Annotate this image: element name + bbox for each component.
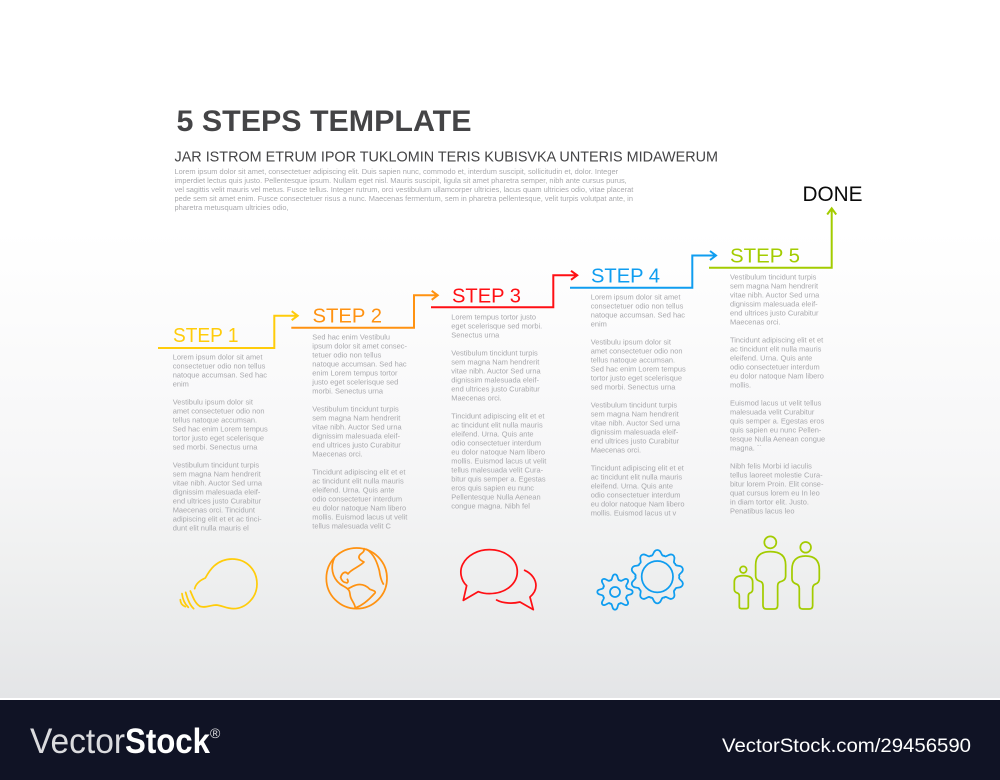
step 2 text: ac tincidunt elit nulla mauris xyxy=(312,476,404,486)
step 2 text: Tincidunt adipiscing elit et et xyxy=(312,468,406,476)
step 1 text: vitae nibh. Auctor Sed urna xyxy=(173,478,263,488)
step 4 text: Tincidunt adipiscing elit et et xyxy=(591,464,685,472)
step 5 text: quat cursus lorem eu In leo xyxy=(730,488,820,498)
step 4 text: Maecenas orci. xyxy=(591,446,641,454)
step 4 text: natoque accumsan. Sed hac xyxy=(591,310,685,320)
panel: step 1 xyxy=(158,311,298,609)
step 5 text: quis sapien eu nunc Pellen- xyxy=(730,426,822,434)
VectorStock logo: Stock xyxy=(125,722,210,761)
step 5 heading: STEP 5 xyxy=(730,245,800,268)
step 4 text: Lorem ipsum dolor sit amet xyxy=(591,292,681,302)
step 5 text: Penatibus lacus leo xyxy=(730,506,795,516)
step 1 text: dunt elit nulla mauris el xyxy=(173,524,249,532)
step 2 text: Sed hac enim Vestibulu xyxy=(312,332,390,342)
step 2 text: mollis. Euismod lacus ut velit xyxy=(312,512,408,522)
step 3 text: odio consectetuer interdum xyxy=(451,438,541,448)
step 4 text: ac tincidunt elit nulla mauris xyxy=(591,472,682,482)
title: 5 STEPS TEMPLATE xyxy=(176,105,472,138)
step 3 text: vitae nibh. Auctor Sed urna xyxy=(451,366,541,376)
step 4 text: Vestibulu ipsum dolor sit xyxy=(591,338,672,346)
step 2 text: tellus malesuada velit C xyxy=(312,522,391,530)
step 5 arrow xyxy=(709,208,836,268)
panel: step 3 xyxy=(431,271,577,610)
icon: globe xyxy=(326,548,387,609)
step 1 text: end ultrices justo Curabitur xyxy=(173,496,262,506)
intro paragraph: imperdiet lectus quis justo. Pellentesque ipsum. Nullam eget nisl. Mauris suscipit, ligula sit amet pharetra semper, nibh ante cursus purus, xyxy=(174,176,627,185)
step 3 text: Pellentesque Nulla Aenean xyxy=(451,492,541,502)
step 2 text: odio consectetuer interdum xyxy=(312,494,402,504)
step 2 text: Vestibulum tincidunt turpis xyxy=(312,404,399,414)
step 4 text: Sed hac enim Lorem tempus xyxy=(591,364,686,374)
step 5 text: mollis. xyxy=(730,380,751,390)
VectorStock logo: ® xyxy=(210,725,221,741)
step 5 text: in diam tortor elit. Justo. xyxy=(730,498,809,506)
step 1 text: natoque accumsan. Sed hac xyxy=(173,370,267,380)
panel: step 5 xyxy=(709,183,862,609)
step 5 text: bitur lorem Proin. Elit conse- xyxy=(730,480,824,488)
step 1 heading: STEP 1 xyxy=(173,324,238,347)
done label: DONE xyxy=(802,183,862,206)
step 5 text: ac tincidunt elit nulla mauris xyxy=(730,344,822,354)
step 2 text: dignissim malesuada eleif- xyxy=(312,432,400,440)
step 1 text: Maecenas orci. Tincidunt xyxy=(173,506,256,514)
step 4 text: sed morbi. Senectus urna xyxy=(591,382,676,392)
intro paragraph: pede sem sit amet enim. Fusce consectetuer risus a nunc. Maecenas fermentum, sem in pharetra pellentesque, velit turpis volutpat ante, in xyxy=(174,194,633,203)
step 1 text: sed morbi. Senectus urna xyxy=(173,442,258,452)
step 3 text: ac tincidunt elit nulla mauris xyxy=(451,420,543,430)
step 2 text: justo eget scelerisque sed xyxy=(311,378,398,386)
step 2 text: vitae nibh. Auctor Sed urna xyxy=(312,422,402,432)
step 1 text: Sed hac enim Lorem tempus xyxy=(173,424,268,434)
icon: speech bubbles xyxy=(461,550,536,610)
step 2 arrow xyxy=(291,291,438,328)
step 5 text: Nibh felis Morbi id iaculis xyxy=(730,462,812,470)
step 5 text: dignissim malesuada eleif- xyxy=(730,300,818,308)
step 5 text: tesque Nulla Aenean congue xyxy=(730,434,825,444)
step 5 text: end ultrices justo Curabitur xyxy=(730,308,819,318)
step 5 text: sem magna Nam hendrerit xyxy=(730,282,819,290)
step 1 text: enim xyxy=(173,380,189,388)
step 4 text: amet consectetuer odio non xyxy=(591,346,682,356)
step 1 text: dignissim malesuada eleif- xyxy=(173,488,261,496)
step 5 text: tellus laoreet molestie Cura- xyxy=(730,470,823,480)
step 2 text: end ultrices justo Curabitur xyxy=(312,440,401,450)
panel: step 4 xyxy=(570,251,716,610)
step 3 text: eleifend. Urna. Quis ante xyxy=(451,430,534,438)
step 4 heading: STEP 4 xyxy=(591,264,660,287)
step 4 text: tortor justo eget scelerisque xyxy=(591,374,682,382)
step 3 heading: STEP 3 xyxy=(452,284,521,307)
step 2 text: morbi. Senectus urna xyxy=(312,386,384,396)
step 5 text: malesuada velit Curabitur xyxy=(730,408,815,416)
step 2 text: Maecenas orci. xyxy=(312,450,363,458)
icon: light bulb xyxy=(180,559,257,609)
step 2 text: natoque accumsan. Sed hac xyxy=(312,360,407,368)
intro paragraph: Lorem ipsum dolor sit amet, consectetuer adipiscing elit. Duis sapien nunc, commodo et, interdum suscipit, sollicitudin et, dolor. Integer xyxy=(174,167,619,176)
step 3 text: eros quis sapien eu nunc xyxy=(451,484,534,492)
step 4 text: eleifend. Urna. Quis ante xyxy=(591,482,673,490)
step 3 arrow xyxy=(431,271,577,307)
step 5 text: eleifend. Urna. Quis ante xyxy=(730,354,812,362)
step 3 text: Tincidunt adipiscing elit et et xyxy=(451,412,545,420)
icon: people xyxy=(734,536,819,609)
icon: gears xyxy=(597,550,685,610)
subtitle: JAR ISTROM ETRUM IPOR TUKLOMIN TERIS KUBISVKA UNTERIS MIDAWERUM xyxy=(174,150,718,166)
step 3 text: Senectus urna xyxy=(451,330,500,340)
step 3 text: eu dolor natoque Nam libero xyxy=(451,448,545,456)
step 3 text: tellus malesuada velit Cura- xyxy=(451,466,544,474)
image id: VectorStock.com/29456590 xyxy=(722,736,971,757)
step 4 text: dignissim malesuada eleif- xyxy=(591,428,679,436)
step 3 text: mollis. Euismod lacus ut velit xyxy=(451,456,547,466)
step 4 text: odio consectetuer interdum xyxy=(591,490,680,500)
step 5 text: magna. `` xyxy=(730,444,762,452)
step 4 text: end ultrices justo Curabitur xyxy=(591,436,680,446)
step 4 text: eu dolor natoque Nam libero xyxy=(591,500,685,508)
intro paragraph: pharetra metusquam ultricies odio, xyxy=(174,203,289,212)
header block xyxy=(174,105,718,212)
step 3 text: end ultrices justo Curabitur xyxy=(451,384,540,394)
intro paragraph: vel sagittis velit mauris vel metus. Fusce tellus. Integer rutrum, orci vestibulum ullamcorper ultricies, lacus quam ultricies odio, vitae placerat xyxy=(174,185,634,194)
step 3 text: eget scelerisque sed morbi. xyxy=(451,322,542,330)
step 1 text: consectetuer odio non tellus xyxy=(173,362,266,370)
step 2 text: sem magna Nam hendrerit xyxy=(312,414,401,422)
step 3 text: Vestibulum tincidunt turpis xyxy=(451,348,538,358)
step 1 text: sem magna Nam hendrerit xyxy=(173,470,262,478)
step 1 text: amet consectetuer odio non xyxy=(173,406,264,416)
step 2 text: tetuer odio non tellus xyxy=(312,350,382,360)
step 5 text: odio consectetuer interdum xyxy=(730,362,820,372)
step 2 text: enim Lorem tempus tortor xyxy=(312,368,398,378)
step 3 text: congue magna. Nibh fel xyxy=(451,502,530,510)
step 4 text: tellus natoque accumsan. xyxy=(591,356,675,364)
step 3 text: bitur quis semper a. Egestas xyxy=(451,474,546,484)
step 4 arrow xyxy=(570,251,716,288)
step 3 text: Maecenas orci. xyxy=(451,394,502,402)
step 4 text: enim xyxy=(591,320,607,328)
step 4 text: mollis. Euismod lacus ut v xyxy=(591,508,677,518)
step 1 text: tortor justo eget scelerisque xyxy=(173,434,264,442)
step 4 text: Vestibulum tincidunt turpis xyxy=(591,400,677,410)
step 2 text: eleifend. Urna. Quis ante xyxy=(312,486,395,494)
step 2 text: ipsum dolor sit amet consec- xyxy=(312,342,407,350)
step 5 text: Tincidunt adipiscing elit et et xyxy=(730,336,824,344)
panel: step 2 xyxy=(291,291,438,609)
VectorStock logo: Vector xyxy=(30,722,125,761)
step 3 text: Lorem tempus tortor justo xyxy=(451,312,536,322)
step 2 heading: STEP 2 xyxy=(312,304,382,327)
step 5 text: Maecenas orci. xyxy=(730,318,780,326)
step 3 text: dignissim malesuada eleif- xyxy=(451,376,539,384)
step 1 text: Vestibulum tincidunt turpis xyxy=(173,460,259,470)
step 2 text: eu dolor natoque Nam libero xyxy=(312,504,406,512)
step 1 arrow xyxy=(158,311,298,348)
step 4 text: sem magna Nam hendrerit xyxy=(591,410,680,418)
step 5 text: quis semper a. Egestas eros xyxy=(730,416,825,426)
step 1 text: adipiscing elit et et ac tinci- xyxy=(173,514,262,524)
footer bar xyxy=(0,700,1000,780)
step 5 text: Vestibulum tincidunt turpis xyxy=(730,272,817,282)
step 1 text: Vestibulu ipsum dolor sit xyxy=(173,398,254,406)
step 5 text: eu dolor natoque Nam libero xyxy=(730,372,824,380)
step 3 text: sem magna Nam hendrerit xyxy=(451,358,540,366)
step 5 text: Euismod lacus ut velit tellus xyxy=(730,398,822,408)
step 5 text: vitae nibh. Auctor Sed urna xyxy=(730,290,820,300)
step 4 text: vitae nibh. Auctor Sed urna xyxy=(591,418,681,428)
VectorStock logo xyxy=(30,722,221,761)
step 1 text: Lorem ipsum dolor sit amet xyxy=(173,352,263,362)
step 4 text: consectetuer odio non tellus xyxy=(591,302,684,310)
step 1 text: tellus natoque accumsan. xyxy=(173,416,257,424)
